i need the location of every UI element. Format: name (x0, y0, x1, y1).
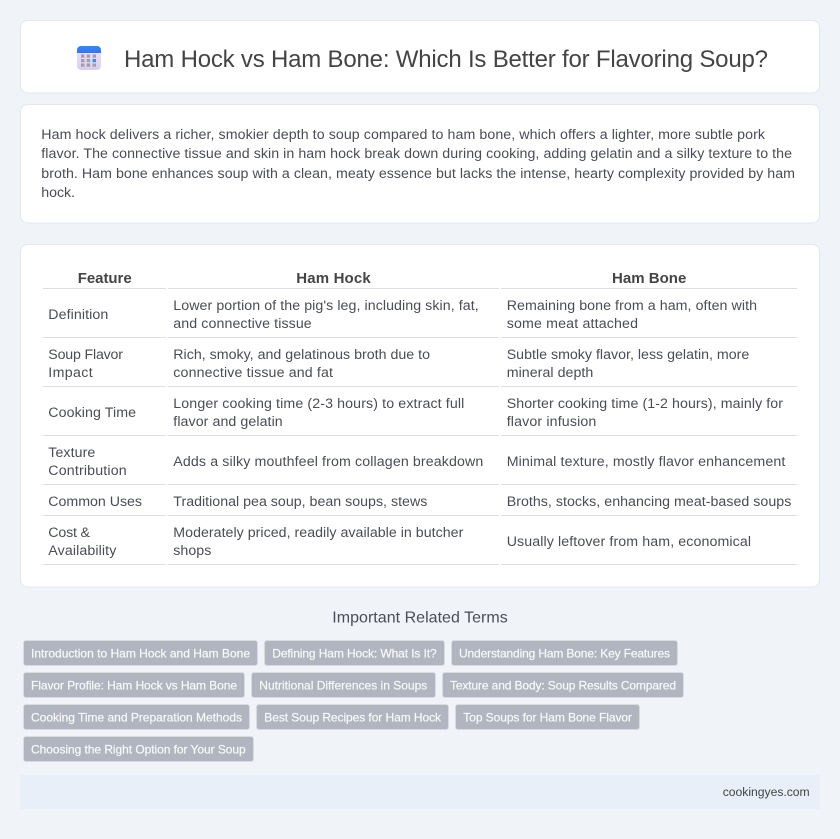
text block: summary paragraph (41, 127, 795, 201)
panel: comparison table (20, 244, 820, 587)
table row: cost and availability: Usually leftover from ham, economical (507, 534, 751, 550)
heading: Ham Hock vs Ham Bone: Which Is Better for Flavoring Soup? (124, 46, 768, 73)
table row: texture contribution: Texture (48, 445, 95, 461)
table row: cost and availability (48, 525, 751, 559)
tag: Nutritional Differences in Soups (259, 678, 427, 692)
tag: Flavor Profile: Ham Hock vs Ham Bone (31, 678, 237, 692)
text block: summary paragraph: flavor. The connective tissue and skin in ham hock break down during cooking, adding gelatin and a silky texture to the (41, 146, 792, 162)
tag (456, 704, 640, 730)
icon: calendar (77, 46, 101, 70)
table row: texture contribution (48, 445, 785, 479)
table row: cooking time (48, 396, 783, 430)
tag: Texture and Body: Soup Results Compared (450, 678, 676, 692)
tag: Introduction to Ham Hock and Ham Bone (31, 646, 250, 660)
table row: texture contribution: Adds a silky mouthfeel from collagen breakdown (173, 454, 483, 470)
tag (264, 640, 444, 666)
table header: Ham Bone (612, 270, 686, 287)
table row: definition: Lower portion of the pig's leg, including skin, fat, (173, 298, 479, 314)
tag (252, 672, 436, 698)
table row: cost and availability: Moderately priced, readily available in butcher (173, 525, 464, 541)
table row: common uses: Broths, stocks, enhancing meat-based soups (507, 494, 791, 510)
table row: definition: Definition (48, 307, 108, 323)
panel: related term tags (24, 640, 684, 762)
table row: definition: and connective tissue (173, 316, 312, 332)
table row: cost and availability: Cost & (48, 525, 91, 541)
table row: texture contribution: Contribution (48, 463, 127, 479)
panel: title (20, 20, 820, 93)
tag (24, 704, 250, 730)
tag: Choosing the Right Option for Your Soup (31, 742, 246, 756)
text block: summary paragraph: broth. Ham bone enhances soup with a clean, meaty essence but lacks the intense, hearty complexity provided by ham (41, 166, 795, 182)
tag (24, 640, 258, 666)
table row: cost and availability: Availability (48, 543, 117, 559)
table row: texture contribution: Minimal texture, mostly flavor enhancement (507, 454, 785, 470)
table row: soup flavor impact (48, 347, 749, 381)
heading: related terms: Important Related Terms (332, 610, 508, 627)
table header (78, 270, 686, 287)
panel: intro text (20, 104, 820, 223)
footer: cookingyes.com (723, 785, 810, 799)
table row: soup flavor impact: Impact (48, 365, 93, 381)
tag: Cooking Time and Preparation Methods (31, 710, 242, 724)
tag: Understanding Ham Bone: Key Features (459, 646, 670, 660)
table row: cooking time: flavor infusion (507, 414, 596, 430)
table row: cooking time: Shorter cooking time (1-2 hours), mainly for (507, 396, 783, 412)
tag: Best Soup Recipes for Ham Hock (264, 710, 442, 724)
table header: Feature (78, 270, 132, 287)
table row: soup flavor impact: Rich, smoky, and gelatinous broth due to (173, 347, 430, 363)
table row: soup flavor impact: Soup Flavor (48, 347, 123, 363)
text block: summary paragraph: Ham hock delivers a richer, smokier depth to soup compared to ham bone, which offers a lighter, more subtle pork (41, 127, 766, 143)
table row: common uses (48, 494, 791, 510)
table row: soup flavor impact: connective tissue and fat (173, 365, 333, 381)
table row: definition: some meat attached (507, 316, 638, 332)
tag (24, 672, 244, 698)
tag (442, 672, 684, 698)
tag: Top Soups for Ham Bone Flavor (463, 710, 632, 724)
table header: Ham Hock (296, 270, 371, 287)
table row: definition (48, 298, 757, 332)
tag (256, 704, 448, 730)
table row: cooking time: Longer cooking time (2-3 hours) to extract full (173, 396, 464, 412)
table row: cost and availability: shops (173, 543, 211, 559)
tag (452, 640, 678, 666)
table row: definition: Remaining bone from a ham, often with (507, 298, 757, 314)
table row: soup flavor impact: Subtle smoky flavor, less gelatin, more (507, 347, 749, 363)
footer (20, 775, 820, 809)
text block: summary paragraph: hock. (41, 185, 75, 201)
table row: cooking time: Cooking Time (48, 405, 136, 421)
tag: Defining Ham Hock: What Is It? (272, 646, 437, 660)
table row: common uses: Common Uses (48, 494, 142, 510)
table row: cooking time: flavor and gelatin (173, 414, 283, 430)
tag (24, 736, 254, 762)
table row: soup flavor impact: mineral depth (507, 365, 593, 381)
table row: common uses: Traditional pea soup, bean soups, stews (173, 494, 427, 510)
